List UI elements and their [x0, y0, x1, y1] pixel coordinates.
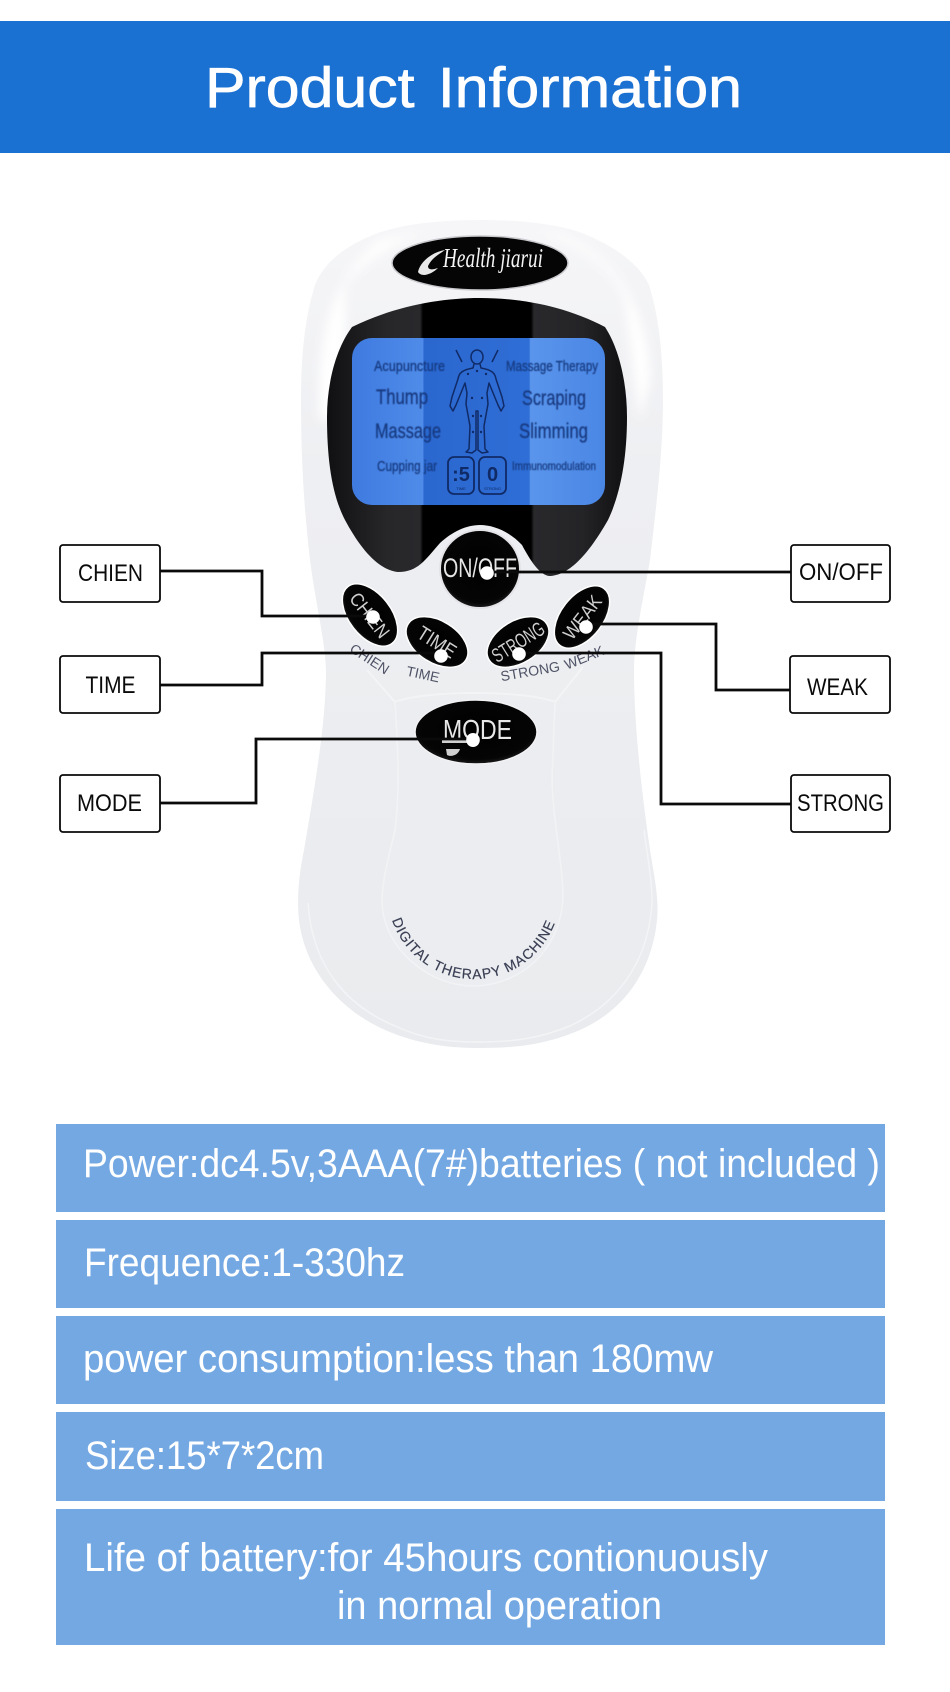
label: TIME: TIME [86, 672, 136, 699]
label: STRONG: STRONG [797, 790, 884, 817]
label: TIME [60, 656, 160, 713]
spec bar: power: Power:dc4.5v,3AAA(7#)batteries ( not included ) [83, 1142, 880, 1186]
connector lines [160, 571, 791, 804]
LCD strength readout: STRONG [484, 486, 501, 491]
label: STRONG [791, 775, 890, 832]
logo text: Health jiarui [442, 243, 543, 273]
spec bar: battery life [56, 1509, 885, 1645]
printed button labels: STRONG [499, 658, 561, 684]
spec bar: power consumption: power consumption:less than 180mw [83, 1337, 713, 1381]
connector endpoint dots [366, 566, 593, 747]
button: ON/OFF: ON/OFF [443, 553, 517, 583]
button: MODE [415, 700, 537, 764]
LCD function labels: Thump [376, 386, 428, 409]
LCD function labels: Acupuncture [374, 358, 445, 375]
curved product name: DIGITAL THERAPY MACHINE [392, 917, 555, 980]
label: ON/OFF [791, 545, 890, 602]
button: CHIEN [331, 574, 409, 656]
button: WEAK [543, 576, 621, 658]
label: ON/OFF: ON/OFF [799, 559, 883, 586]
LCD function labels: Massage Therapy [506, 358, 598, 375]
device highlights and panel seams [308, 232, 652, 1042]
spec bar: power [56, 1124, 885, 1212]
printed button labels [347, 640, 607, 685]
logo oval [392, 236, 568, 290]
spec bar: size [56, 1412, 885, 1501]
LCD function labels: Massage [375, 420, 441, 443]
button: STRONG [478, 606, 558, 678]
header banner [0, 21, 950, 153]
screen bezel [327, 298, 627, 576]
LCD time readout [448, 457, 474, 494]
label: CHIEN [60, 545, 160, 602]
icon: human body figure [450, 350, 504, 453]
LCD function labels: Slimming [519, 420, 588, 443]
spec bar: frequency: Frequence:1-330hz [84, 1241, 405, 1285]
label: WEAK: WEAK [807, 674, 868, 701]
label: MODE [60, 775, 160, 832]
logo leaf icon [418, 250, 445, 275]
button: MODE: MODE [443, 714, 512, 745]
LCD time readout: TIME [456, 486, 466, 491]
button: TIME: TIME [413, 622, 460, 663]
spec bar: battery life: in normal operation [337, 1584, 662, 1628]
spec bar: power consumption [56, 1316, 885, 1404]
LCD function labels: Cupping jar [377, 458, 437, 475]
spec bar: frequency [56, 1220, 885, 1308]
LCD strength readout [479, 457, 506, 494]
label: MODE: MODE [77, 790, 142, 817]
label: WEAK [790, 656, 890, 713]
LCD time readout: :5 [452, 464, 470, 486]
button: WEAK: WEAK [560, 592, 607, 644]
button: CHIEN: CHIEN [345, 589, 393, 643]
printed button labels: WEAK [562, 642, 607, 673]
button: TIME [397, 606, 477, 678]
LCD function labels: Scraping [522, 387, 586, 410]
title: Product Information [205, 56, 742, 120]
label: CHIEN: CHIEN [78, 560, 143, 587]
printed button labels: CHIEN [347, 640, 392, 677]
device: digital therapy machine [298, 220, 663, 1048]
LCD screen [352, 338, 605, 505]
spec bar: size: Size:15*7*2cm [85, 1434, 324, 1478]
spec bar: battery life: Life of battery:for 45hours contionuously [84, 1536, 768, 1580]
LCD strength readout: 0 [487, 464, 498, 486]
device body [298, 220, 663, 1048]
button: STRONG: STRONG [488, 618, 549, 668]
printed button labels: TIME [405, 663, 441, 685]
LCD function labels: Immunomodulation [512, 459, 596, 473]
LCD function labels [374, 358, 598, 475]
button: ON/OFF [440, 530, 520, 608]
